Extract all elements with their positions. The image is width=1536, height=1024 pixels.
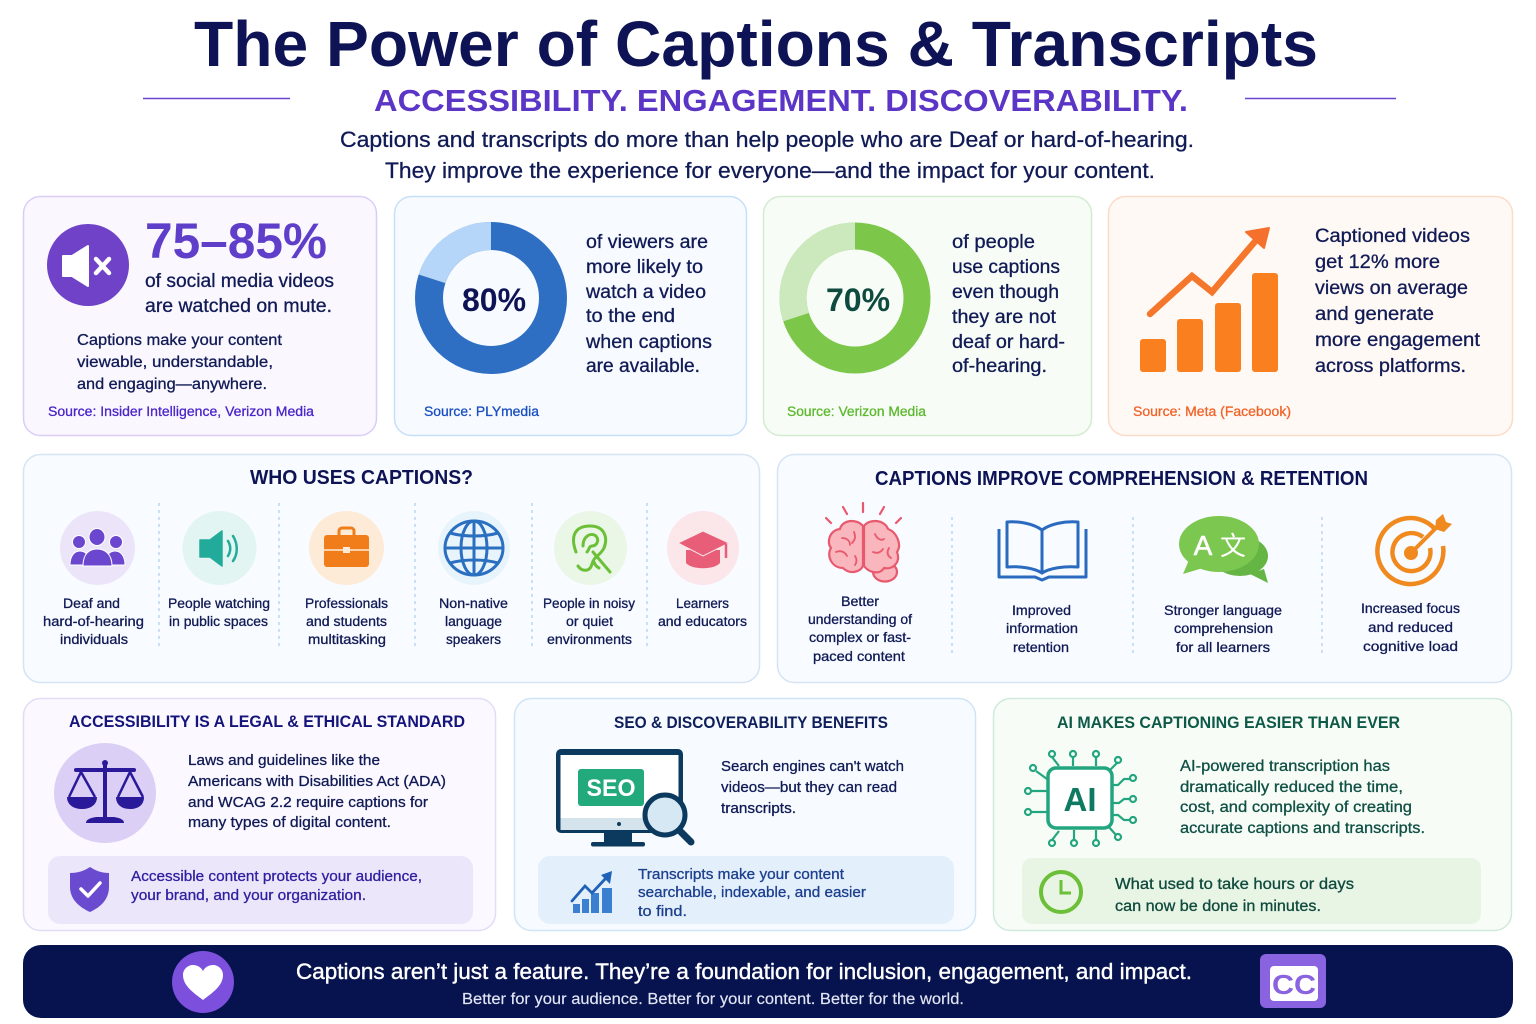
- statistic description: of people: [952, 232, 1035, 253]
- labels: language: [445, 614, 502, 629]
- icon: scales of justice: [54, 743, 156, 843]
- callout: accessible content: your brand, and your organization.: [131, 887, 366, 904]
- statistic description: of-hearing.: [952, 356, 1047, 377]
- callout: accessible content: Accessible content protects your audience,: [131, 868, 422, 885]
- panel: who uses captions: [24, 454, 760, 682]
- footer banner: [23, 945, 1513, 1018]
- icon: rising chart: [572, 871, 612, 913]
- statistic description: across platforms.: [1315, 356, 1466, 377]
- statistic description: use captions: [952, 257, 1060, 278]
- icon: AI chip: [1025, 751, 1136, 846]
- body text: accurate captions and transcripts.: [1180, 820, 1425, 837]
- labels: comprehension: [1174, 621, 1273, 636]
- labels: [808, 594, 1460, 664]
- statistic description: of social media videos: [145, 271, 334, 292]
- chart: 70% donut: [793, 236, 917, 360]
- closing subline: Better for your audience. Better for your content. Better for the world.: [462, 991, 964, 1008]
- icon: CC badge: [1260, 954, 1326, 1008]
- statistic description: [585, 232, 712, 377]
- labels: and reduced: [1368, 620, 1453, 635]
- icon: brain: [826, 503, 901, 582]
- labels: complex or fast-: [809, 630, 911, 645]
- labels: in public spaces: [169, 614, 268, 629]
- heading: CAPTIONS IMPROVE COMPREHENSION & RETENTION: [875, 468, 1368, 490]
- intro text: They improve the experience for everyone—and the impact for your content.: [385, 158, 1155, 183]
- callout: transcripts: [538, 856, 954, 924]
- statistic description: and generate: [1315, 304, 1434, 325]
- statistic description: they are not: [952, 307, 1057, 328]
- source: Source: Verizon Media: [787, 404, 926, 419]
- chart: 80% donut: 80%: [462, 282, 526, 318]
- body text: Laws and guidelines like the: [188, 752, 380, 769]
- labels: Professionals: [305, 596, 388, 611]
- source: Source: PLYmedia: [424, 404, 540, 419]
- callout: accessible content: [48, 856, 473, 924]
- statistic description: deaf or hard-: [952, 332, 1065, 353]
- panel: mute statistic: [24, 196, 376, 436]
- panel: 12% more views: [1108, 196, 1512, 436]
- statistic description: to the end: [586, 306, 675, 327]
- statistic description: get 12% more: [1315, 252, 1440, 273]
- icon: group of people: [60, 511, 135, 585]
- body text: AI-powered transcription has: [1180, 758, 1390, 775]
- labels: and students: [306, 614, 387, 629]
- body text: videos—but they can read: [721, 779, 897, 796]
- heading: AI MAKES CAPTIONING EASIER THAN EVER: [1057, 713, 1400, 732]
- statistic: 75–85%: 75–85%: [145, 213, 327, 269]
- labels: People in noisy: [543, 596, 635, 611]
- closing statement: Captions aren’t just a feature. They’re a foundation for inclusion, engagement, and impact.: [296, 959, 1192, 984]
- labels: information: [1006, 621, 1078, 636]
- statistic description: are watched on mute.: [145, 296, 332, 317]
- labels: understanding of: [808, 612, 912, 627]
- panel: AI captioning: [994, 698, 1512, 930]
- heading: SEO & DISCOVERABILITY BENEFITS: [614, 713, 888, 732]
- icon: speaker: [182, 511, 256, 585]
- labels: paced content: [813, 649, 905, 664]
- intro text: Captions and transcripts do more than help people who are Deaf or hard-of-hearing.: [340, 127, 1194, 152]
- labels: [43, 596, 747, 647]
- labels: speakers: [446, 632, 501, 647]
- chart: growth bars and arrow: [1140, 228, 1278, 372]
- supporting text: [77, 332, 283, 393]
- statistic description: more likely to: [586, 257, 703, 278]
- source: Source: Meta (Facebook): [1133, 404, 1291, 419]
- icon: muted speaker: [47, 224, 129, 306]
- supporting text: Captions make your content: [77, 332, 283, 349]
- statistic description: [145, 271, 334, 317]
- icon: heart: [172, 951, 234, 1013]
- statistic description: more engagement: [1315, 330, 1481, 351]
- icon: open book: [999, 522, 1086, 580]
- labels: Stronger language: [1164, 603, 1282, 618]
- body text: [188, 752, 446, 831]
- statistic description: views on average: [1315, 278, 1468, 299]
- labels: retention: [1013, 640, 1069, 655]
- body text: [1180, 758, 1425, 837]
- title: The Power of Captions & Transcripts: [194, 8, 1318, 80]
- labels: individuals: [60, 632, 128, 647]
- labels: Learners: [676, 596, 729, 611]
- labels: Improved: [1012, 603, 1071, 618]
- icon: translation speech bubbles: A: [1194, 530, 1213, 561]
- chart: 70% donut: 70%: [826, 282, 890, 318]
- icon: translation speech bubbles: 文: [1220, 531, 1246, 561]
- labels: environments: [547, 632, 632, 647]
- statistic description: [1315, 226, 1481, 377]
- labels: Increased focus: [1361, 601, 1460, 616]
- callout: time saved: can now be done in minutes.: [1115, 898, 1321, 915]
- icon: briefcase: [309, 511, 384, 585]
- body text: dramatically reduced the time,: [1180, 779, 1403, 796]
- icon: target with arrow: [1377, 514, 1452, 584]
- statistic description: are available.: [586, 356, 700, 377]
- body text: and WCAG 2.2 require captions for: [188, 794, 428, 811]
- labels: and educators: [658, 614, 747, 629]
- labels: for all learners: [1176, 640, 1270, 655]
- panel: legal and ethical standard: [24, 698, 496, 930]
- intro text: [340, 127, 1194, 183]
- panel: SEO benefits: [514, 698, 976, 930]
- callout: time saved: What used to take hours or days: [1115, 876, 1354, 893]
- icon: ear: [554, 511, 627, 585]
- body text: transcripts.: [721, 800, 796, 817]
- supporting text: viewable, understandable,: [77, 354, 273, 371]
- statistic description: watch a video: [585, 282, 706, 303]
- heading: WHO USES CAPTIONS?: [250, 467, 473, 489]
- labels: cognitive load: [1363, 639, 1458, 654]
- statistic description: even though: [952, 282, 1059, 303]
- labels: hard-of-hearing: [43, 614, 144, 629]
- icon: SEO monitor with magnifier: SEO: [586, 775, 636, 802]
- labels: multitasking: [308, 632, 386, 647]
- body text: Americans with Disabilities Act (ADA): [188, 773, 446, 790]
- body text: many types of digital content.: [188, 814, 391, 831]
- subtitle: ACCESSIBILITY. ENGAGEMENT. DISCOVERABILITY.: [374, 83, 1188, 118]
- labels: Deaf and: [63, 596, 120, 611]
- callout: transcripts: searchable, indexable, and easier: [638, 884, 866, 901]
- body text: cost, and complexity of creating: [1180, 799, 1412, 816]
- labels: or quiet: [566, 614, 613, 629]
- icon: graduation cap: [667, 511, 739, 585]
- labels: Non-native: [439, 596, 508, 611]
- icon: AI chip: AI: [1064, 781, 1096, 818]
- panel: comprehension and retention: [778, 454, 1512, 682]
- callout: time saved: [1022, 858, 1481, 924]
- source: Source: Insider Intelligence, Verizon Media: [48, 404, 314, 419]
- icon: SEO monitor with magnifier: [556, 749, 691, 846]
- body text: Search engines can't watch: [721, 758, 904, 775]
- supporting text: and engaging—anywhere.: [77, 376, 267, 393]
- icon: globe: [438, 511, 510, 585]
- chart: 80% donut: [429, 236, 553, 360]
- labels: People watching: [168, 596, 270, 611]
- icon: shield: [70, 867, 109, 912]
- statistic description: [952, 232, 1065, 377]
- statistic description: when captions: [585, 332, 712, 353]
- icon: clock: [1041, 872, 1081, 912]
- body text: [721, 758, 904, 817]
- panel: 70% statistic: [764, 196, 1092, 436]
- heading: ACCESSIBILITY IS A LEGAL & ETHICAL STANDARD: [69, 712, 465, 731]
- statistic description: of viewers are: [586, 232, 708, 253]
- labels: Better: [841, 594, 879, 609]
- callout: transcripts: Transcripts make your content: [638, 866, 845, 883]
- statistic description: Captioned videos: [1315, 226, 1470, 247]
- icon: translation speech bubbles: [1179, 516, 1268, 583]
- panel: 80% statistic: [394, 196, 746, 436]
- icon: CC badge: CC: [1272, 969, 1316, 1000]
- callout: transcripts: to find.: [638, 903, 687, 920]
